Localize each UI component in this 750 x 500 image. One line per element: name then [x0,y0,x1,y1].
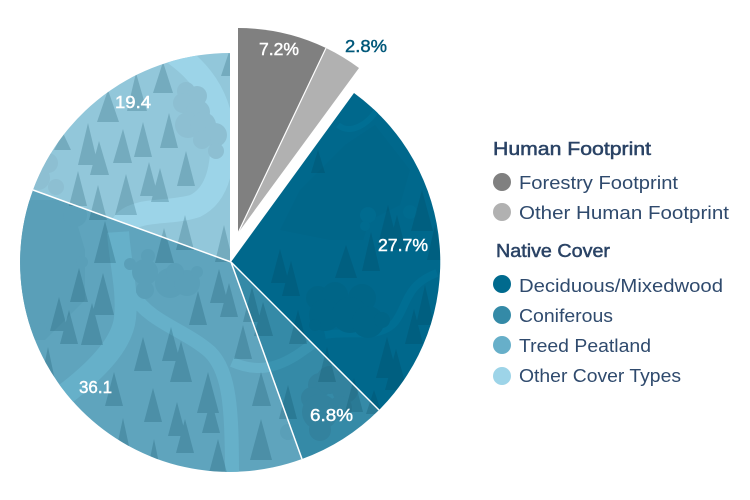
divider between footprint wedges [238,48,326,233]
label 7.2%: 7.2% [259,39,299,59]
label 19.4: 19.4 [115,92,151,112]
wedge: deciduous/mixedwood 27.7 [231,93,440,410]
wedge: treed peatland 36.1 [18,190,302,475]
value labels [79,36,428,425]
legend item: forestry footprint: Forestry Footprint [519,173,678,193]
legend item: treed peatland: Treed Peatland [519,336,651,356]
wedge: other human footprint 2.8 [238,48,359,233]
heading: native cover: Native Cover [496,241,610,261]
wedge: coniferous 6.8 [231,262,379,459]
wedge dividers [33,190,379,459]
wedge: other cover types 19.4 [26,50,231,262]
label 27.7%: 27.7% [378,235,428,255]
legend [493,139,729,386]
label 36.1: 36.1 [79,377,112,397]
label 6.8%: 6.8% [310,405,353,425]
forest trees [40,52,443,473]
pie chart [18,28,443,475]
legend item: other cover types: Other Cover Types [519,366,681,386]
heading: human footprint: Human Footprint [493,139,651,159]
legend item: other human footprint: Other Human Footprint [519,203,729,223]
legend item: deciduous/mixedwood: Deciduous/Mixedwood [519,276,723,296]
label 2.8%: 2.8% [345,36,387,56]
legend item: coniferous: Coniferous [519,306,613,326]
wedge: forestry footprint 7.2 [238,28,326,233]
